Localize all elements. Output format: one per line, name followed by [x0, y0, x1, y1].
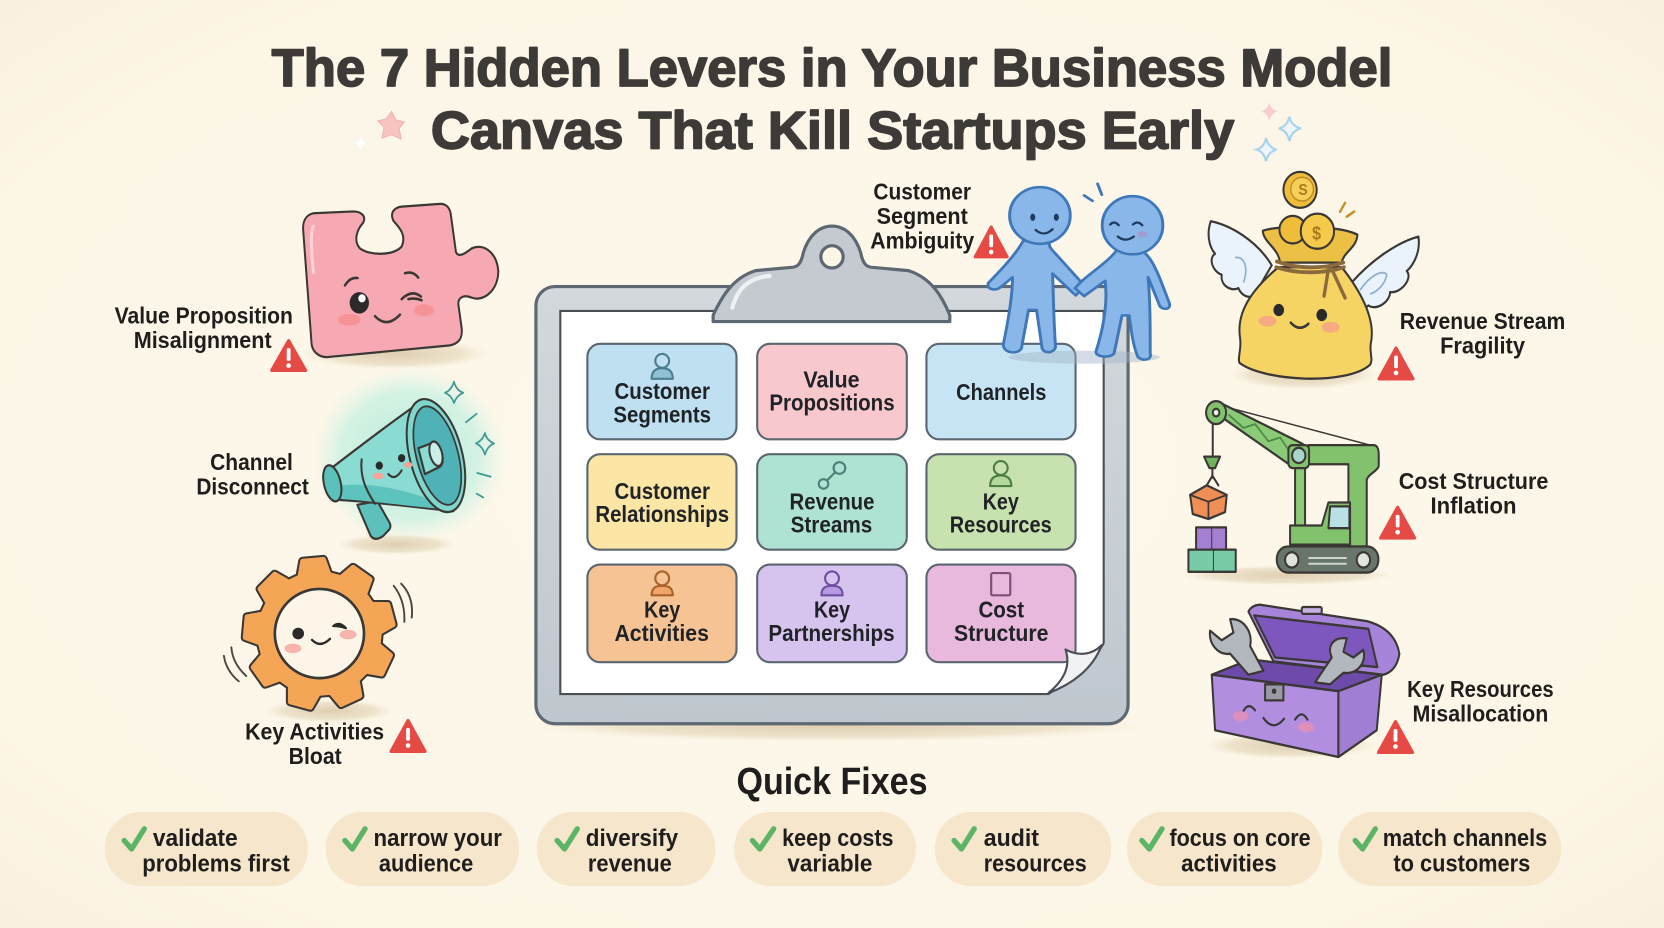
illustration: toolbox [1203, 605, 1399, 759]
icon: warning revenue [1379, 348, 1413, 379]
card: Key Resources: Resources [950, 512, 1052, 538]
pill: focus on core activities: activities [1181, 850, 1277, 877]
sparkles [445, 382, 494, 497]
label: Key Resources Misallocation [1407, 676, 1554, 727]
title: The 7 Hidden Levers in Your Business Model [272, 39, 1392, 98]
pill: diversify revenue: revenue [588, 850, 672, 877]
icon: warning cost [1381, 507, 1415, 538]
card: Customer Relationships [587, 454, 736, 550]
box front [1212, 675, 1338, 757]
card: Key Resources: Key [983, 488, 1019, 514]
card: Customer Segments: Segments [613, 401, 711, 427]
icon: person [652, 571, 673, 595]
card: Key Activities [587, 565, 736, 662]
hook [1204, 457, 1220, 468]
illustration: gear [224, 554, 412, 723]
card: Key Activities: Activities [614, 620, 709, 646]
card: Key Activities: Key [644, 597, 680, 623]
pill: keep costs variable: keep costs [782, 825, 894, 852]
inner box [1212, 659, 1382, 691]
label: Key Resources Misallocation: Misallocation [1412, 701, 1548, 727]
coin falling [1283, 172, 1317, 208]
card: Cost Structure: Structure [954, 620, 1049, 646]
pill: diversify revenue [537, 812, 715, 886]
card: Channels: Channels [956, 379, 1046, 405]
card: Value Propositions [757, 344, 907, 439]
pill: narrow your audience [326, 812, 519, 886]
illustration: puzzle piece [300, 204, 498, 369]
icon: link nodes [819, 462, 845, 489]
illustration: megaphone [313, 367, 507, 555]
card: Cost Structure [926, 565, 1076, 662]
title: Canvas That Kill Startups Early [431, 102, 1235, 161]
decorative sparkles around title [354, 102, 1301, 161]
label: Customer Segment Ambiguity: Segment [877, 203, 968, 229]
icon: person [821, 571, 843, 595]
card: Customer Segments [587, 344, 736, 439]
bag neck ruffle [1263, 227, 1357, 263]
card: Cost Structure: Cost [978, 597, 1024, 623]
left person [988, 187, 1085, 352]
label: Revenue Stream Fragility [1400, 308, 1565, 358]
card: Revenue Streams: Streams [791, 512, 872, 538]
label: Customer Segment Ambiguity [870, 179, 974, 253]
pill: keep costs variable: variable [787, 850, 872, 877]
clipboard board [536, 287, 1128, 724]
character: customer segment people [988, 184, 1170, 364]
pill: match channels to customers [1338, 812, 1561, 886]
cab [1290, 503, 1350, 545]
card: Key Partnerships: Partnerships [768, 620, 895, 646]
card: Customer Relationships: Relationships [595, 501, 729, 527]
label: Customer Segment Ambiguity: Customer [873, 179, 971, 205]
label: Cost Structure Inflation [1399, 468, 1548, 519]
horn [333, 401, 453, 511]
card: Channels [926, 344, 1076, 439]
card: Key Resources [926, 454, 1076, 550]
icon: warning key resources [1379, 722, 1412, 752]
clipboard [528, 226, 1148, 742]
rope [1276, 261, 1345, 298]
icon: person [990, 461, 1011, 486]
pill: match channels to customers: match channels [1383, 825, 1547, 852]
wrenches [1210, 619, 1364, 684]
pill: focus on core activities: focus on core [1169, 825, 1311, 852]
label: Cost Structure Inflation: Inflation [1431, 493, 1516, 519]
motion ticks [1084, 184, 1102, 201]
pill: audit resources [935, 812, 1111, 886]
paper sheet [560, 311, 1104, 694]
pill: validate problems first [105, 812, 308, 886]
face [1243, 706, 1307, 725]
pill: audit resources: audit [984, 825, 1039, 852]
wings [1209, 221, 1272, 297]
card: Revenue Streams [757, 454, 907, 550]
pill: diversify revenue: diversify [586, 825, 679, 852]
handle [357, 501, 390, 539]
pill: match channels to customers: to customers [1393, 850, 1530, 877]
column and beam [1295, 464, 1305, 529]
pill: validate problems first: problems first [142, 850, 290, 877]
label: Value Proposition Misalignment [115, 303, 293, 353]
label: Customer Segment Ambiguity: Ambiguity [870, 227, 974, 253]
icon: warning key activities [391, 721, 425, 751]
card: Revenue Streams: Revenue [790, 488, 874, 514]
label: Channel Disconnect: Disconnect [196, 474, 309, 500]
illustration: money bag with wings: S [1298, 181, 1308, 200]
icon: warning customer segment [975, 227, 1007, 257]
label: Key Resources Misallocation: Key Resources [1407, 676, 1554, 702]
icon: warning value proposition [272, 341, 306, 370]
label: Value Proposition Misalignment: Value Proposition [115, 303, 293, 329]
label: Key Activities Bloat [245, 719, 384, 769]
pill: focus on core activities [1127, 812, 1322, 886]
illustration: money bag with wings [1209, 172, 1419, 390]
cable [1218, 405, 1370, 445]
hanging box [1190, 485, 1227, 519]
illustration: money bag with wings: $ [1312, 223, 1321, 244]
illustration: crane [1178, 401, 1395, 585]
card: Key Partnerships: Key [814, 597, 850, 623]
clip [713, 226, 950, 322]
bell [396, 391, 476, 520]
icon: document [991, 573, 1010, 595]
pill: audit resources: resources [984, 850, 1087, 877]
card: Value Propositions: Value [803, 366, 860, 392]
label: Key Activities Bloat: Bloat [289, 743, 342, 769]
label: Channel Disconnect: Channel [210, 449, 293, 475]
pill: validate problems first: validate [153, 825, 238, 852]
right person [1075, 196, 1170, 360]
label: Revenue Stream Fragility: Fragility [1440, 332, 1525, 358]
icon: person [652, 354, 673, 379]
pill: narrow your audience: narrow your [374, 825, 502, 852]
card: Customer Relationships: Customer [614, 478, 710, 504]
card: Customer Segments: Customer [614, 378, 710, 404]
label: Key Activities Bloat: Key Activities [245, 719, 384, 745]
card: Value Propositions: Propositions [769, 390, 895, 416]
page curl [1048, 645, 1102, 693]
stacked blocks [1196, 527, 1226, 550]
label: Channel Disconnect [196, 449, 309, 500]
bag body [1239, 267, 1372, 379]
label: Revenue Stream Fragility: Revenue Stream [1400, 308, 1565, 334]
heading: Quick Fixes: Quick Fixes [736, 760, 928, 803]
boom [1211, 402, 1303, 467]
quick fixes row [105, 812, 1561, 886]
label: Value Proposition Misalignment: Misalignment [134, 327, 272, 353]
card: Key Partnerships [757, 565, 907, 662]
label: Cost Structure Inflation: Cost Structure [1399, 468, 1548, 494]
pill: keep costs variable [734, 812, 916, 886]
tracks [1277, 547, 1378, 573]
title [272, 39, 1392, 161]
lid [1248, 605, 1399, 675]
pill: narrow your audience: audience [379, 850, 473, 877]
